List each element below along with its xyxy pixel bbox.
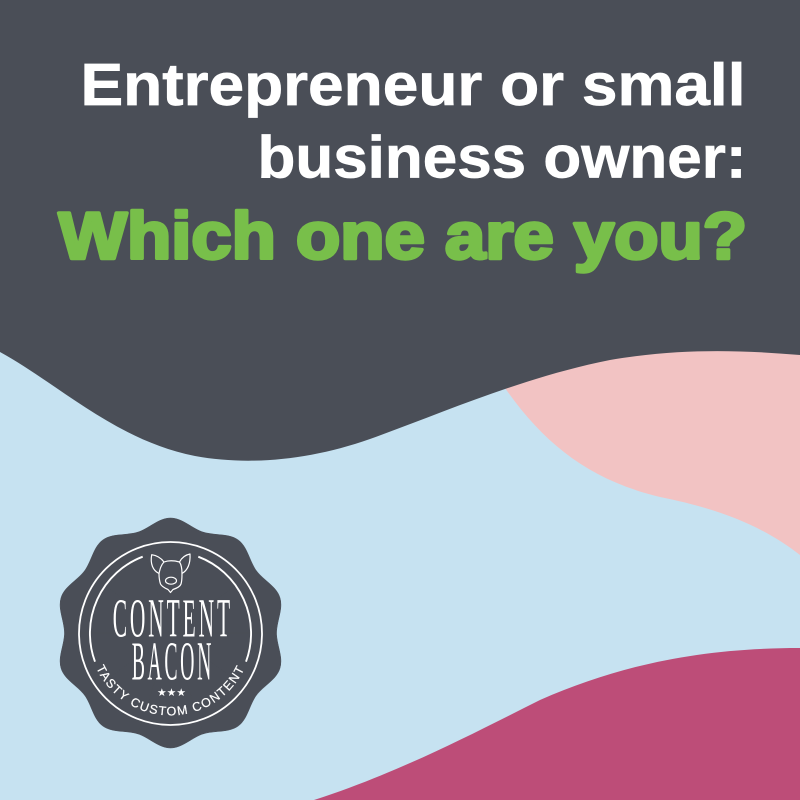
- badge: outer ring: [79, 542, 262, 725]
- badge: inner ring arcs: [90, 557, 251, 662]
- icon: pig head: [151, 554, 190, 592]
- wave: dark header panel: [0, 0, 800, 461]
- logo badge: [60, 518, 282, 748]
- wave: magenta: [314, 648, 800, 800]
- title line 2: business owner:: [258, 124, 746, 190]
- badge: scalloped seal: [51, 518, 290, 748]
- wave: pink: [480, 340, 800, 555]
- title question: Which one are you?: [59, 200, 747, 272]
- title line 1: Entrepreneur or small: [80, 51, 746, 118]
- logo wordmark: CONTENT: CONTENT: [113, 589, 233, 650]
- logo tagline on curve: TASTY CUSTOM CONTENT: [97, 664, 243, 716]
- title: [59, 51, 747, 272]
- logo wordmark: BACON: BACON: [132, 630, 214, 692]
- logo stars: ★★★: [157, 686, 186, 699]
